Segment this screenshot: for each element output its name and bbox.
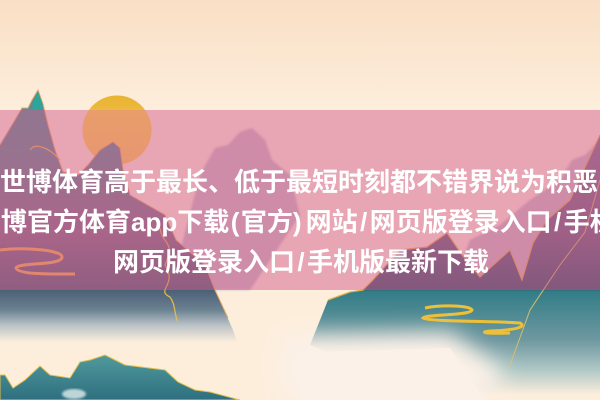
translucent pink band [0, 110, 600, 290]
mountain gold outline [0, 90, 228, 318]
gold contour lines [30, 146, 178, 322]
gold river swirl [0, 249, 75, 274]
text line 3: 网页版登录入口/手机版最新下载 [113, 247, 489, 277]
mountain gold outline [328, 135, 600, 300]
thin gold ridge line [510, 180, 600, 365]
sun [82, 96, 152, 164]
teal summit [32, 91, 43, 110]
bottom teal hill [0, 355, 240, 400]
mist over the valley [280, 332, 505, 400]
hill foam [62, 389, 86, 399]
left mountain [0, 90, 240, 350]
faded background mountains [170, 128, 600, 290]
text line 1: 世博体育高于最长、低于最短时刻都不错界说为积恶 [0, 167, 598, 197]
right mountains [310, 135, 600, 400]
gold river swirls [423, 306, 522, 333]
text line 2: 博官方体育app下载(官方)网站/网页版登录入口/手机 [1, 207, 600, 237]
